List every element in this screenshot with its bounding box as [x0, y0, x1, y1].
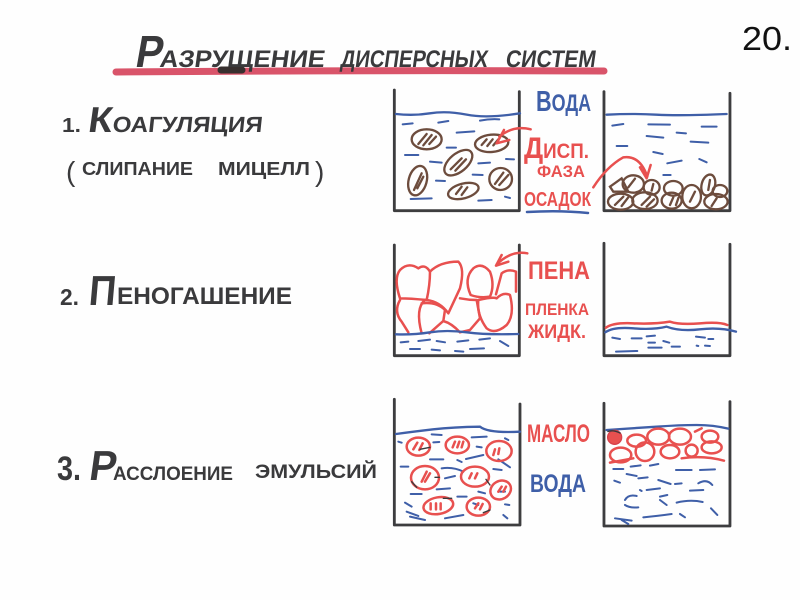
- beaker: thin film after foam collapse: [604, 243, 736, 356]
- row 1: coagulation beakers and labels: [394, 86, 730, 213]
- label: liquid film: ПЛЕНКА: [525, 300, 589, 319]
- label: dispersed phase: ФАЗА: [537, 162, 585, 181]
- heading: emulsion separation: Р: [87, 442, 120, 489]
- title with underline: АЗРУЩЕНИЕ: [158, 46, 327, 73]
- row 3: emulsion beakers and labels: [394, 399, 730, 526]
- heading: defoaming: 2.: [60, 284, 79, 310]
- subheading: micelle adhesion: МИЦЕЛЛ: [218, 159, 310, 179]
- row 2: defoaming beakers and labels: [394, 243, 736, 356]
- subheading: micelle adhesion: ): [315, 156, 324, 187]
- label: dispersed phase: ДИСП.: [524, 132, 589, 165]
- title with underline: Р: [132, 26, 168, 77]
- subheading: micelle adhesion: (: [66, 156, 76, 187]
- subheading: micelle adhesion: [66, 156, 324, 187]
- label: liquid film: [525, 300, 589, 343]
- beaker: sediment at the bottom: [593, 92, 730, 211]
- beaker: separated oil layer on water: [604, 402, 730, 526]
- heading: emulsion separation: 3.: [57, 450, 81, 488]
- beaker: foam above liquid: [394, 245, 527, 356]
- heading: emulsion separation: АССЛОЕНИЕ: [113, 464, 233, 485]
- heading: coagulation: К: [86, 99, 117, 140]
- heading: coagulation: ОАГУЛЯЦИЯ: [111, 112, 264, 137]
- heading: emulsion separation: [57, 442, 377, 489]
- heading: coagulation: [62, 99, 264, 140]
- label: water phase: ВОДА: [530, 470, 586, 498]
- label: water: ВОДА: [536, 86, 591, 118]
- page number: 20.: [742, 20, 792, 57]
- label: foam: ПЕНА: [528, 257, 590, 285]
- label: dispersed phase: [524, 132, 589, 181]
- label: oil: МАСЛО: [527, 420, 590, 448]
- title with underline: СИСТЕМ: [504, 46, 598, 73]
- title with underline: ДИСПЕРСНЫХ: [339, 46, 490, 73]
- beaker: oil droplets in water: [394, 399, 520, 525]
- heading: defoaming: ЕНОГАШЕНИЕ: [117, 283, 292, 310]
- heading: defoaming: [60, 267, 292, 314]
- label: liquid film: ЖИДК.: [527, 322, 586, 343]
- heading: coagulation: 1.: [62, 115, 81, 137]
- label: sediment: ОСАДОК: [524, 189, 592, 211]
- title with underline: [116, 26, 604, 77]
- heading: defoaming: П: [87, 267, 118, 314]
- beaker: dispersed particles in water: [394, 90, 531, 211]
- heading: emulsion separation: ЭМУЛЬСИЙ: [255, 461, 377, 483]
- subheading: micelle adhesion: СЛИПАНИЕ: [82, 159, 193, 179]
